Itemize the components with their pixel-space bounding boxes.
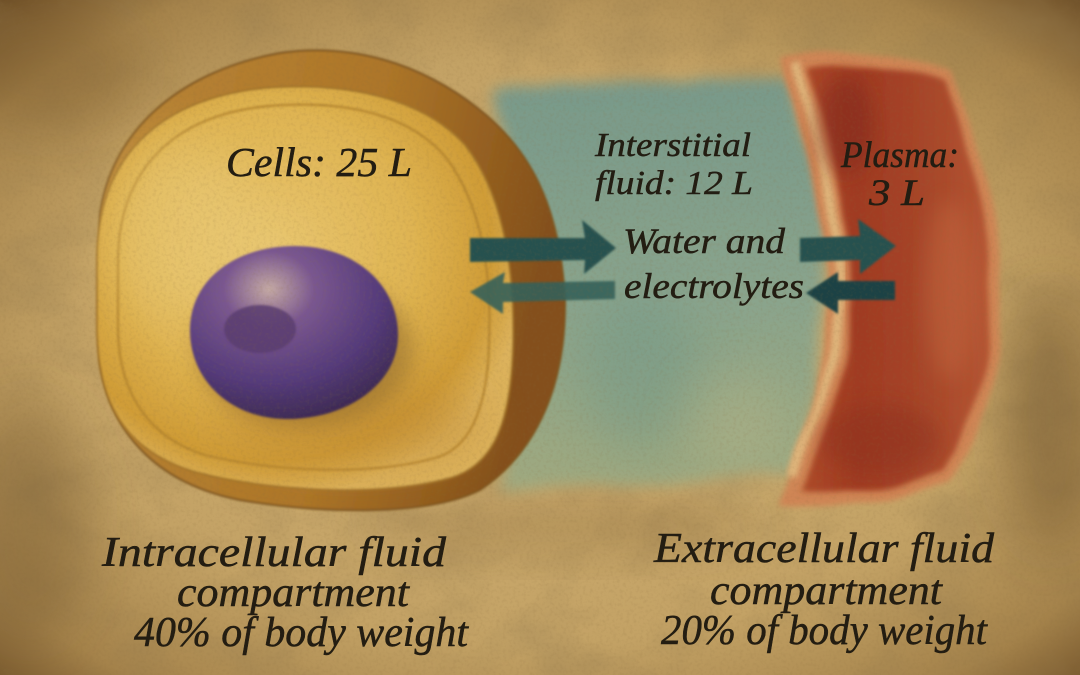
label: plasma volume: Plasma:: [840, 135, 959, 176]
label: interstitial fluid volume: [594, 127, 753, 202]
label: plasma volume: 3 L: [868, 173, 925, 214]
arrow: interstitial to plasma: [800, 219, 896, 274]
label: intracellular fluid compartment: 40% of body weight: [134, 610, 469, 656]
label: water and electrolytes: electrolytes: [624, 266, 804, 306]
arrow: interstitial to cell: [470, 272, 615, 314]
cell outer membrane: [100, 50, 565, 510]
label: intracellular fluid compartment: Intracellular fluid: [101, 530, 447, 576]
nucleus: [190, 246, 413, 426]
arrows: water and electrolytes exchange: [470, 219, 896, 314]
panel: interstitial fluid wash: [490, 80, 825, 490]
label: extracellular fluid compartment: 20% of body weight: [661, 608, 988, 654]
label: plasma volume: [840, 135, 959, 214]
icon: cell: [97, 50, 565, 510]
label: cells volume: Cells: 25 L: [226, 139, 412, 185]
arrow: plasma to interstitial: [806, 272, 895, 314]
label: water and electrolytes: Water and: [623, 221, 786, 261]
cell inner contour: [118, 105, 489, 470]
label: interstitial fluid volume: Interstitial: [594, 127, 751, 164]
label: water and electrolytes: [623, 221, 804, 306]
label: intracellular fluid compartment: [101, 530, 469, 656]
label: extracellular fluid compartment: [653, 526, 995, 654]
nucleolus: [224, 305, 296, 353]
arrow: cell to interstitial: [470, 220, 616, 274]
label: extracellular fluid compartment: Extracellular fluid: [653, 526, 995, 572]
label: interstitial fluid volume: fluid: 12 L: [595, 165, 753, 202]
label: extracellular fluid compartment: compartment: [710, 568, 943, 614]
label: intracellular fluid compartment: compartment: [177, 570, 410, 616]
panel: plasma blood vessel: [778, 53, 1002, 506]
cell cytoplasm: [97, 87, 513, 490]
